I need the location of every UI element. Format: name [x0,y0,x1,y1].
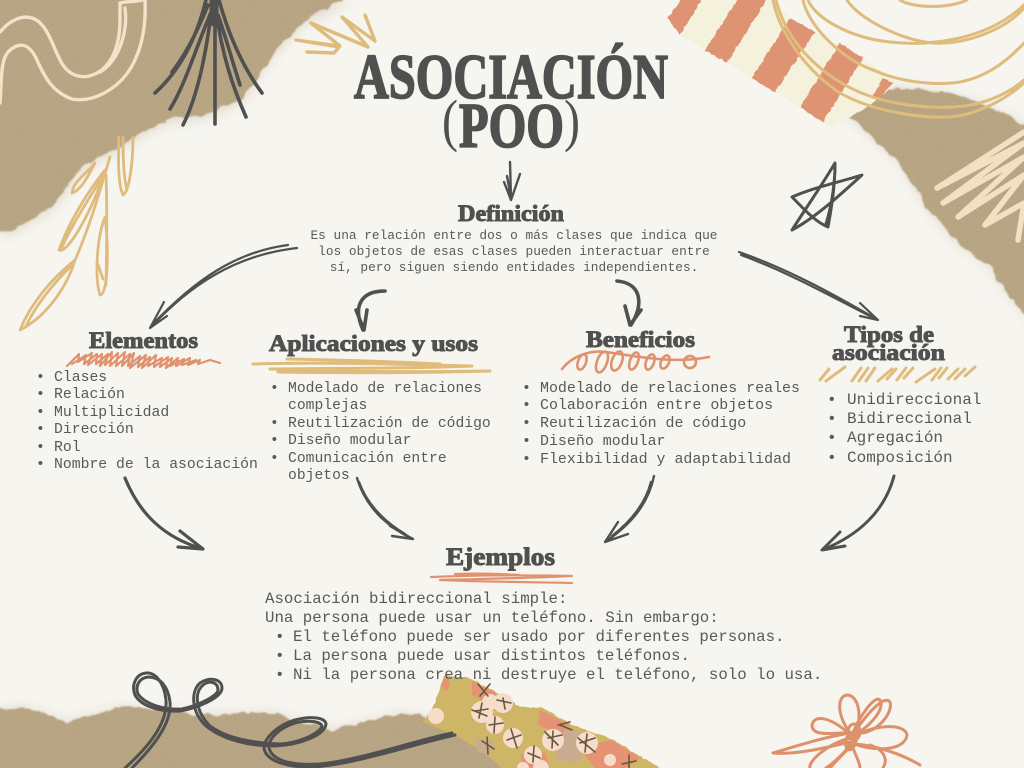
doodle: orange flower, bottom right [773,695,920,768]
text: ejemplos body [265,590,822,684]
list: beneficios: Reutilización de código [540,416,746,432]
text: definition body: los objetos de esas clases pueden interactuar entre [318,244,710,259]
text: ejemplos body: El teléfono puede ser usado por diferentes personas. [293,628,784,646]
doodle: yellow zigzag, top [296,15,375,53]
title [354,41,668,161]
list: tipos: Bidireccional [847,410,972,428]
heading: tipos de asociación: Tipos de [844,322,934,347]
section: aplicaciones y usos [253,331,491,484]
list: aplicaciones: Modelado de relaciones [288,381,482,397]
list: beneficios: • [522,398,531,414]
heading: elementos: Elementos [89,328,198,353]
list: tipos [827,391,981,467]
doodle: cream scribble, right [937,132,1024,240]
washi tape: striped, top right [668,0,897,127]
list: elementos [36,370,258,473]
list: aplicaciones: • [270,381,279,397]
list: beneficios: • [522,416,531,432]
arrow: definition to aplicaciones [356,291,385,330]
torn cardboard: bottom [0,707,640,768]
text: ejemplos body: Ni la persona crea ni destruye el teléfono, solo lo usa. [293,666,822,684]
list: beneficios: • [522,381,531,397]
torn cardboard: top left [0,0,358,235]
list: elementos: Dirección [54,422,134,438]
washi tape: floral, bottom centre [423,675,668,768]
underline: yellow hatching [820,367,975,382]
list: elementos: Relación [54,387,125,403]
list: aplicaciones: • [270,433,279,449]
doodle: yellow concentric circles, top right [773,0,1024,117]
heading: aplicaciones: Aplicaciones y usos [269,331,478,356]
heading: tipos de asociación [832,322,945,365]
list: aplicaciones: • [270,416,279,432]
list: aplicaciones: Reutilización de código [288,416,491,432]
underline: yellow lines [253,359,490,373]
list: elementos: Clases [54,370,107,386]
section: tipos de asociación [820,322,981,467]
list: elementos: • [36,387,45,403]
text: ejemplos body: La persona puede usar distintos teléfonos. [293,647,690,665]
torn cardboard: top right [847,87,1024,326]
list: tipos: • [827,410,837,428]
list: elementos: Multiplicidad [54,405,169,421]
list: aplicaciones: Diseño modular [288,433,411,449]
text: definition body [310,228,718,275]
underline: orange scribble [67,352,220,368]
list: tipos: Unidireccional [847,391,981,409]
heading: definition: Definición [458,201,564,226]
list: aplicaciones: complejas [288,398,367,414]
list: aplicaciones: objetos [288,468,350,484]
list: elementos: • [36,422,45,438]
list: beneficios: Diseño modular [540,434,666,450]
underline: orange loops [562,350,709,374]
heading: ejemplos: Ejemplos [446,544,555,571]
list: aplicaciones: • [270,451,279,467]
list: tipos: Agregación [847,429,943,447]
list: elementos: • [36,405,45,421]
list: elementos: Rol [54,440,81,456]
list: tipos: • [827,391,837,409]
arrow: aplicaciones to ejemplos [357,478,413,539]
doodle: cream squiggles, top left [0,0,145,103]
text: ejemplos body: • [275,666,284,684]
list: tipos: • [827,429,837,447]
doodle: dark looped ribbon, bottom [125,673,455,768]
list: elementos: Nombre de la asociación [54,457,258,473]
heading: beneficios: Beneficios [586,327,695,352]
heading: tipos de asociación: asociación [832,340,945,365]
title: POO [459,90,564,161]
list: elementos: • [36,370,45,386]
doodle: yellow leaves, left [20,137,133,330]
text: definition body: sí, pero siguen siendo entidades independientes. [330,260,698,275]
section: ejemplos [265,544,822,684]
title: ( [442,88,458,153]
arrow: tipos to ejemplos [822,476,894,550]
list: aplicaciones [270,381,491,484]
text: ejemplos body: • [275,628,284,646]
arrow: beneficios to ejemplos [605,476,654,542]
doodle: dark spiky lines, top left [155,0,262,125]
arrow: definition to elementos [150,245,297,328]
list: beneficios: Flexibilidad y adaptabilidad [540,452,791,468]
arrow: definition to beneficios [617,281,641,325]
section: definition [310,201,718,275]
list: elementos: • [36,457,45,473]
list: tipos: • [827,449,837,467]
icon: hand drawn star [792,163,862,230]
arrow: title to definition [504,162,520,200]
text: ejemplos body: Una persona puede usar un teléfono. Sin embargo: [265,609,719,627]
list: beneficios [522,381,800,468]
list: beneficios: • [522,452,531,468]
list: aplicaciones: Comunicación entre [288,451,447,467]
list: elementos: • [36,440,45,456]
section: elementos [36,328,258,473]
text: ejemplos body: Asociación bidireccional simple: [265,590,567,608]
list: beneficios: Colaboración entre objetos [540,398,773,414]
underline: orange lines [431,574,572,583]
list: beneficios: Modelado de relaciones reales [540,381,800,397]
title: ) [564,88,580,153]
list: beneficios: • [522,434,531,450]
section: beneficios [522,327,800,468]
arrow: definition to tipos [739,252,878,320]
title: ASOCIACIÓN [354,41,668,112]
text: definition body: Es una relación entre dos o más clases que indica que [310,228,718,243]
text: ejemplos body: • [275,647,284,665]
arrow: elementos to ejemplos [125,478,203,549]
list: tipos: Composición [847,449,953,467]
